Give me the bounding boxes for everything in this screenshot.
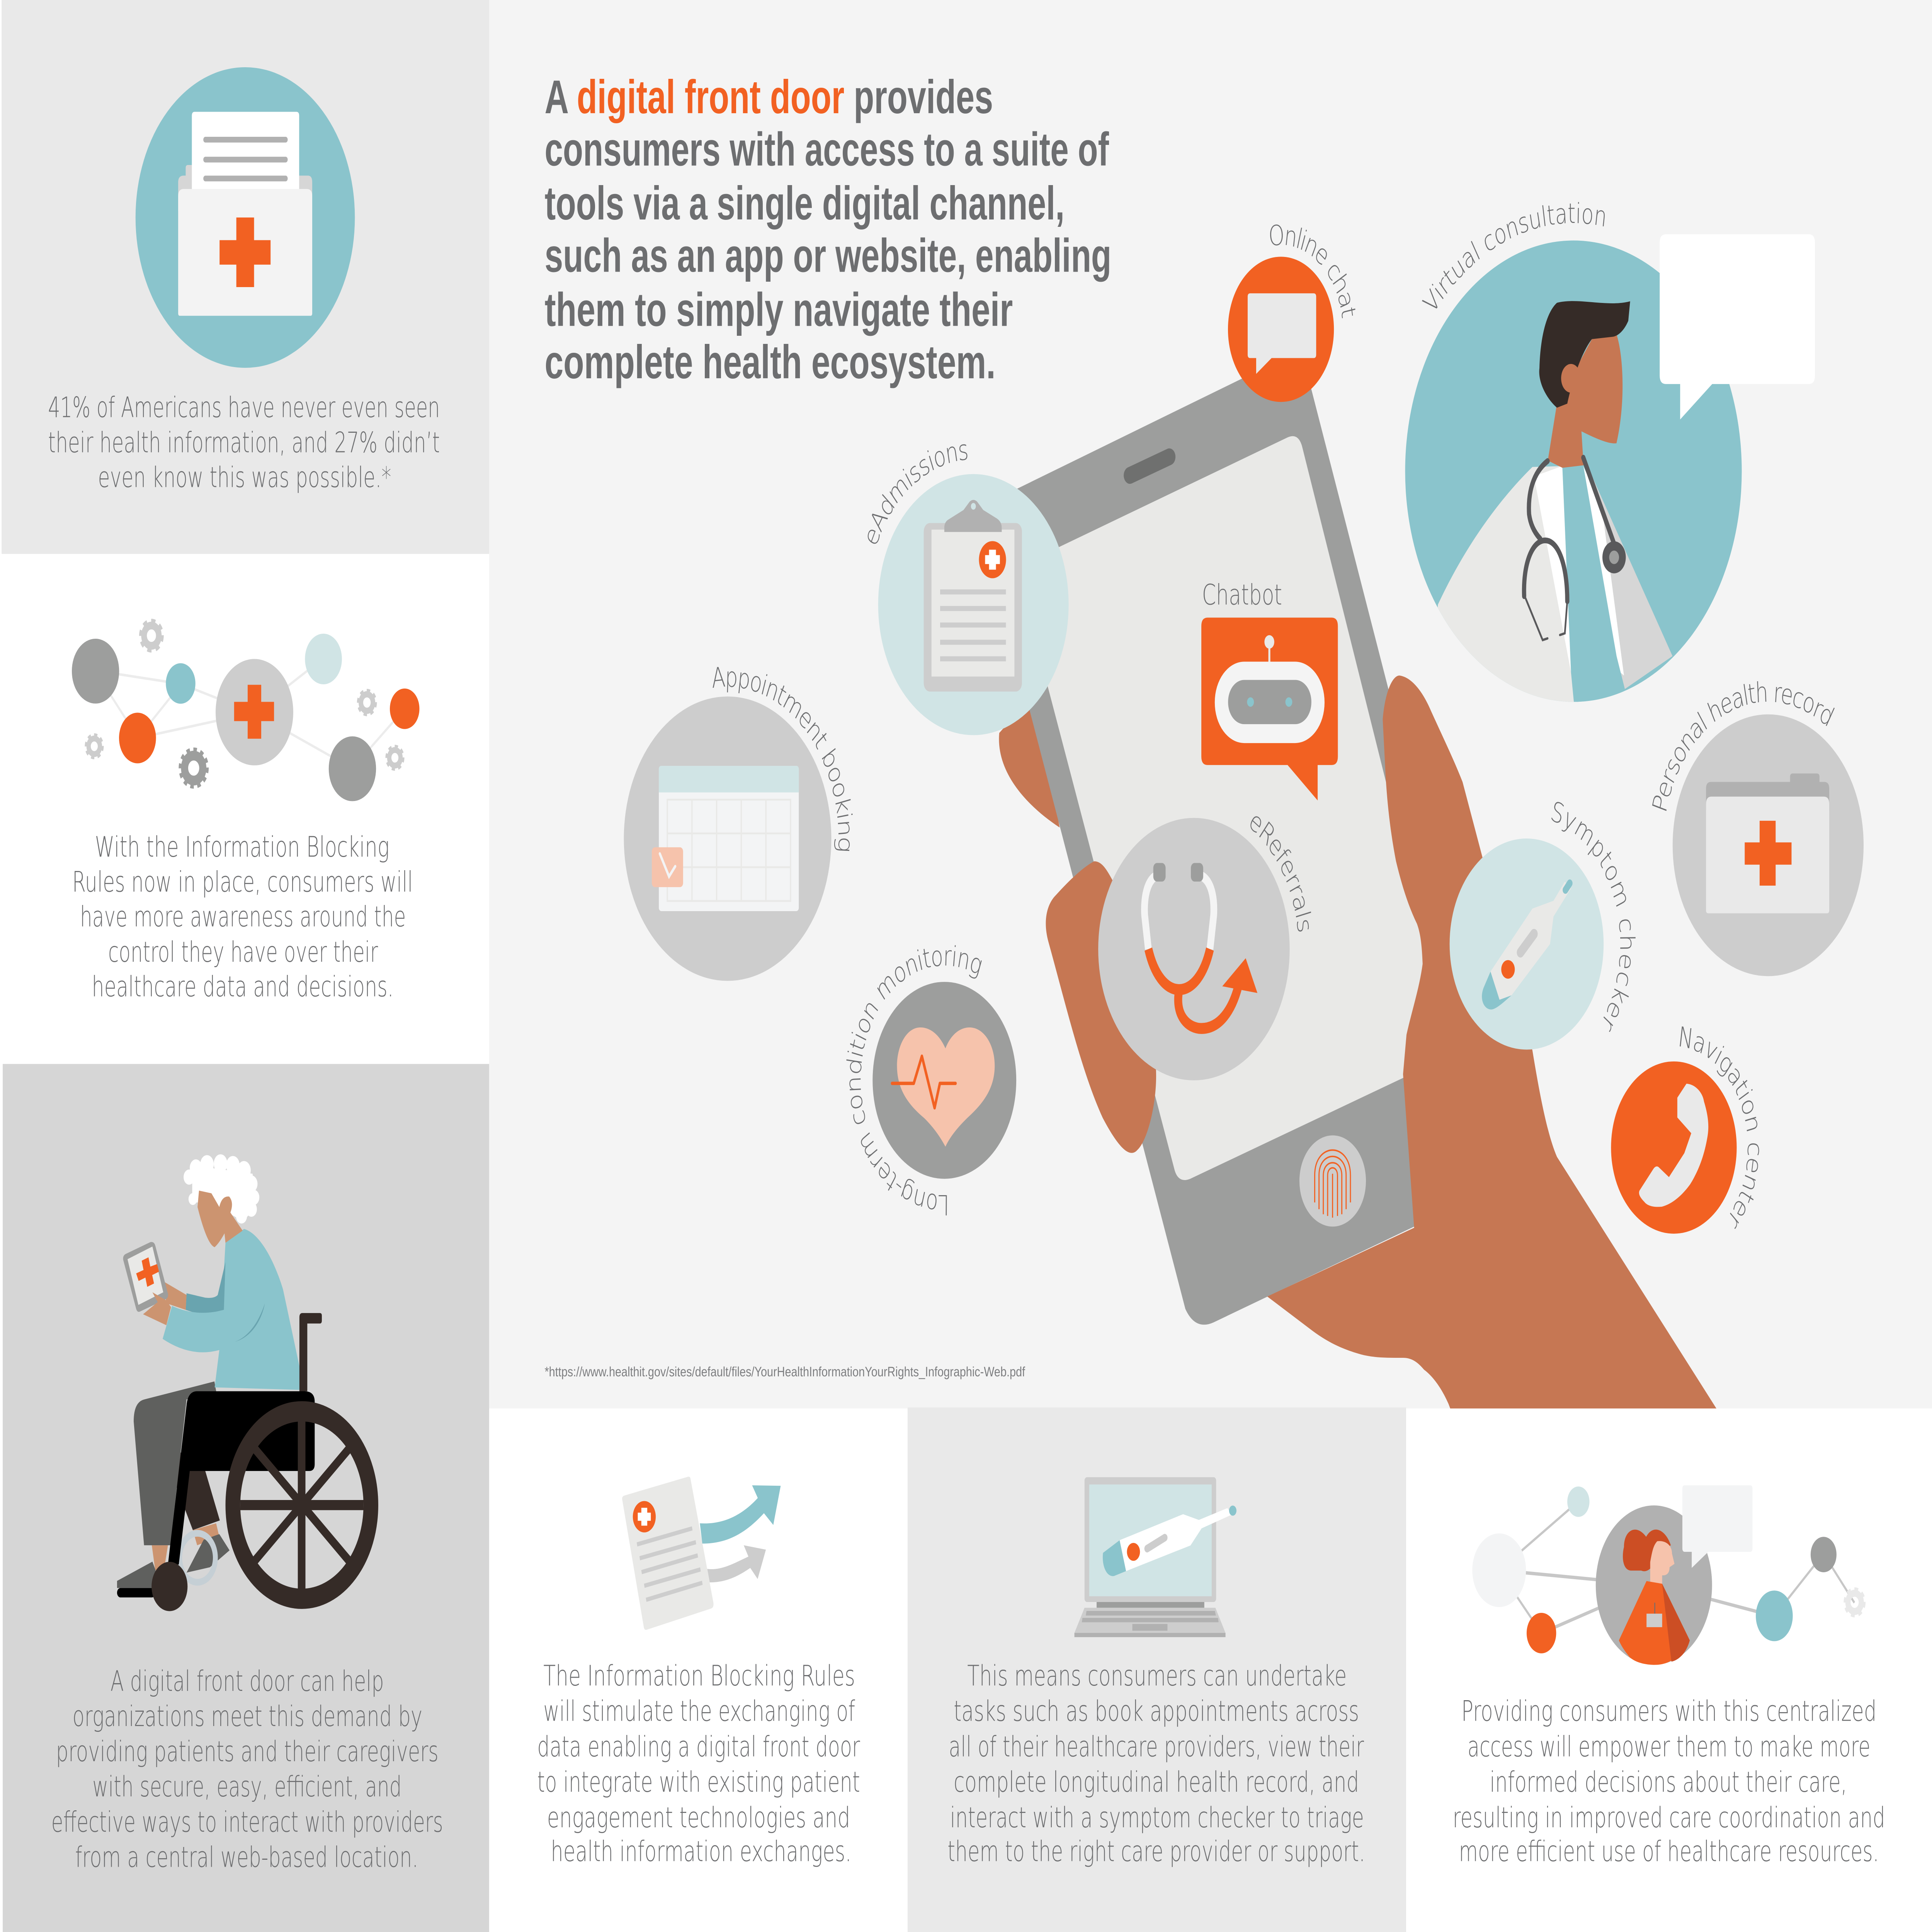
feature: navigation center: Navigation center [1677,1020,1767,1236]
panel: exchanging data [489,1410,908,1932]
phone screen [1017,436,1454,1180]
icon: thermometer [1482,881,1571,1009]
feature: long-term condition monitoring: Long-term condition monitoring [842,940,986,1221]
text: centralized access: access will empower them to make more [1468,1730,1871,1764]
text: consumer awareness: have more awareness around the [80,900,406,934]
icon: medical folder [136,67,355,368]
text: consumer tasks: interact with a symptom checker to triage [950,1801,1364,1834]
text: centralized access: Providing consumers with this centralized [1461,1695,1877,1728]
text: consumer awareness: control they have over their [108,936,378,969]
footnote: *https://www.healthit.gov/sites/default/files/YourHealthInformationYourRights_Infographic-Web.pdf [544,1364,1026,1379]
icon: laptop with thermometer [1075,1477,1236,1637]
feature: personal health record: Personal health record [1648,676,1838,816]
text: digital front door help: providing patients and their caregivers [56,1735,439,1768]
text: digital front door help: from a central web-based location. [75,1841,418,1874]
icon: heart with pulse [892,1027,995,1147]
feature: online chat: Online chat [1268,219,1361,321]
speech bubble [1660,234,1815,420]
text: consumer tasks: This means consumers can undertake [967,1659,1347,1692]
heading: complete health ecosystem. [544,335,996,388]
illustration: older woman in wheelchair with tablet [117,1154,371,1611]
text: consumer tasks: tasks such as book appointments across [954,1695,1359,1728]
text: centralized access: informed decisions about their care, [1490,1766,1847,1799]
phone body [977,350,1514,1325]
text: information blocking rules stimulate exchange: to integrate with existing patient [537,1766,860,1799]
icon: document with arrows [622,1477,781,1630]
text: information blocking rules stimulate exchange: engagement technologies and [547,1801,850,1834]
panel: centralized access [1406,1410,1932,1932]
feature: appointment booking: Appointment booking [711,661,857,854]
icon: stethoscope and arrow [1145,863,1257,1029]
feature: symptom checker: Symptom checker [1548,795,1639,1038]
feature: appointment booking [624,661,857,981]
phone speaker [1130,457,1169,475]
icon: robot speech bubble [1201,617,1338,801]
text: centralized access [1453,1695,1885,1868]
illustration: hand holding phone [977,350,1716,1408]
feature: virtual consultation [1405,197,1815,709]
heading: tools via a single digital channel, [544,177,1065,230]
feature: eReferrals [1098,804,1317,1080]
icon: connected consumer network [1472,1485,1864,1665]
feature: chatbot: Chatbot [1202,578,1282,612]
feature: navigation center [1611,1020,1767,1236]
feature: symptom checker [1450,795,1639,1049]
text: centralized access: more efficient use of healthcare resources. [1459,1835,1879,1868]
feature: eReferrals: eReferrals [1245,804,1317,935]
text: information blocking rules stimulate exchange: data enabling a digital front door [537,1730,860,1764]
text: digital front door help: effective ways to interact with providers [51,1806,443,1839]
fingerprint button [1299,1135,1366,1226]
icon: health record folder [1706,774,1829,913]
heading: consumers with access to a suite of [544,123,1109,176]
feature: eAdmissions [859,434,1069,735]
text: digital front door help: with secure, easy, efficient, and [92,1770,402,1803]
text: digital front door help: A digital front door can help [111,1665,384,1698]
icon: calendar [652,766,799,911]
text: information blocking rules stimulate exchange: health information exchanges. [551,1835,851,1868]
icon: data network [72,621,419,801]
text: centralized access: resulting in improved care coordination and [1453,1801,1885,1834]
text: digital front door help [51,1665,443,1874]
text: consumer tasks: them to the right care provider or support. [947,1835,1365,1868]
text: consumer awareness: With the Information Blocking [95,831,389,864]
panel: information blocking rules awareness [2,554,489,1064]
illustration: doctor [1429,301,1672,709]
text: 41% statistic [48,391,440,494]
text: 41% statistic: 41% of Americans have never even seen [48,391,440,424]
text: 41% statistic: even know this was possible.* [98,461,391,494]
palm and fingers [1267,675,1716,1408]
panel: patient in wheelchair [3,1064,489,1932]
panel: consumer tasks [908,1407,1406,1932]
heading [544,70,1111,388]
panel: main digital front door [489,0,1932,1408]
text: consumer tasks: all of their healthcare providers, view their [949,1730,1364,1764]
text: 41% statistic: their health information, and 27% didn’t [48,426,440,459]
feature: personal health record [1648,676,1864,976]
text: information blocking rules stimulate exchange: will stimulate the exchanging of [543,1695,855,1728]
text: consumer awareness: healthcare data and decisions. [92,970,394,1003]
heading: them to simply navigate their [544,283,1013,336]
icon: clipboard [924,500,1022,692]
feature: online chat [1228,219,1361,402]
text: consumer awareness: Rules now in place, consumers will [72,866,413,899]
text: consumer tasks: complete longitudinal health record, and [954,1766,1359,1799]
icon: telephone handset [1639,1084,1708,1207]
feature: eAdmissions: eAdmissions [859,434,969,551]
feature: chatbot [1201,578,1338,801]
feature: virtual consultation: Virtual consultation [1418,197,1609,319]
text: consumer tasks [947,1659,1365,1868]
heading: such as an app or website, enabling [544,229,1111,282]
text: information blocking rules stimulate exchange [537,1659,860,1868]
thumb [1046,861,1156,1153]
text: digital front door help: organizations meet this demand by [72,1700,422,1733]
text: consumer awareness [72,831,413,1003]
panel: health information statistic [2,0,489,554]
heading: A digital front door provides [544,70,993,123]
text: information blocking rules stimulate exchange: The Information Blocking Rules [543,1659,855,1692]
